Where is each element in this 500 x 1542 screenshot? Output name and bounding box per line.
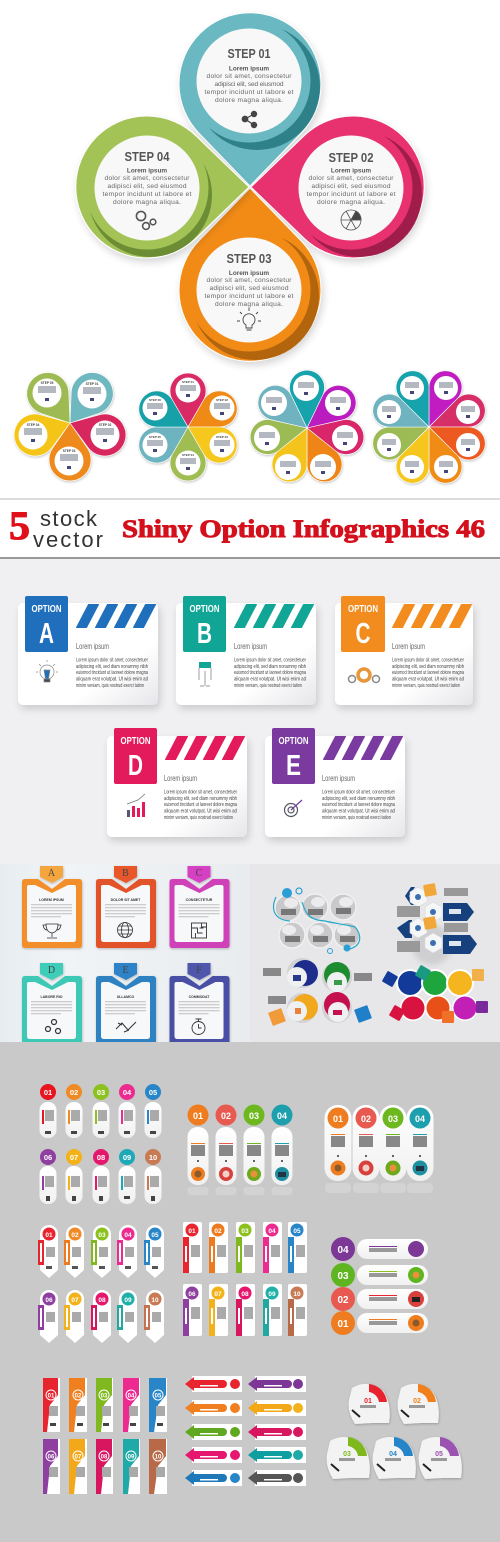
panel: option C: euismod tincidunt ut laoreet dolore magna [392, 670, 464, 676]
panel: ten arrow tags [38, 1225, 164, 1343]
pill 03: 03 [97, 1088, 105, 1097]
panel: option D: D [128, 750, 143, 782]
cluster: hexagon arrows [397, 883, 477, 965]
banner 03: 03 [101, 1394, 108, 1400]
arrow crimson [248, 1424, 306, 1440]
panel: six step flower: STEP 01 [182, 380, 194, 384]
frame C: C [196, 868, 203, 879]
row 03: 03 [337, 1271, 349, 1282]
panel: option B: aliquam erat volutpat. Ut wisi enim ad [234, 676, 306, 682]
options section background [0, 559, 500, 864]
panel: option B: Lorem ipsum dolor sit amet, consectetuer [234, 658, 306, 664]
panel: option E: Lorem ipsum [322, 774, 355, 783]
panel: option B: OPTION [190, 604, 220, 615]
tag 04: 04 [124, 1232, 132, 1239]
panel: option C: OPTION [348, 604, 378, 615]
panel: ten small pills [40, 1084, 162, 1204]
banner 07: 07 [75, 1454, 82, 1460]
pill 04: 04 [277, 1111, 287, 1121]
logo text: 5 [9, 503, 30, 548]
sticker 03: 03 [343, 1451, 351, 1458]
banner 08: 08 [101, 1454, 108, 1460]
card 10: 10 [293, 1291, 301, 1298]
frame E: E [122, 965, 129, 976]
panel: option C: Lorem ipsum [392, 642, 425, 651]
card 01: 01 [188, 1228, 196, 1235]
card 08: 08 [241, 1291, 249, 1298]
step 03 petal: Lorem ipsum [229, 270, 269, 277]
panel: option A: Lorem ipsum [76, 642, 109, 651]
panel: five step flower [8, 364, 132, 481]
frame C: CONSECTETUR [186, 898, 213, 902]
step 04 petal: STEP 04 [124, 150, 170, 164]
frame B: B [122, 868, 129, 879]
pill 05: 05 [149, 1088, 157, 1097]
arrow pink [185, 1447, 242, 1463]
pill 08: 08 [97, 1153, 105, 1162]
arrow purple [248, 1376, 306, 1392]
card 02: 02 [214, 1228, 222, 1235]
pill 10: 10 [149, 1153, 157, 1162]
step 03 petal: STEP 03 [226, 252, 272, 266]
pill 01: 01 [44, 1088, 52, 1097]
tag 02: 02 [71, 1232, 79, 1239]
step 01 petal: STEP 01 [228, 47, 271, 61]
panel: ten arrow labels [185, 1376, 306, 1486]
pill 02: 02 [361, 1114, 371, 1124]
panel: option A: Lorem ipsum dolor sit amet, consectetuer [76, 658, 148, 664]
panel: four wide pills [324, 1105, 434, 1193]
frame E: ULLAMCO [117, 995, 135, 999]
tag 09: 09 [124, 1297, 132, 1304]
pill 03: 03 [249, 1111, 259, 1121]
logo text: stock [40, 506, 98, 531]
panel: option A: minim veniam, quis nostrud exerci tation [76, 683, 144, 689]
step 04 petal: adipisci elit, sed eiusmod [108, 183, 187, 190]
sticker 05: 05 [435, 1451, 443, 1458]
panel: option B: adipiscing elit, sed diam nonummy nibh [234, 664, 306, 670]
step 03 petal: dolore magna aliqua. [215, 301, 283, 308]
banner 06: 06 [48, 1454, 55, 1460]
card 06: 06 [188, 1291, 196, 1298]
step 01 petal: Lorem ipsum [229, 66, 269, 72]
card 03: 03 [241, 1228, 249, 1235]
panel: eight step flower [368, 366, 490, 488]
pill 02: 02 [221, 1111, 231, 1121]
pill 01: 01 [333, 1114, 343, 1124]
row 04: 04 [337, 1245, 349, 1256]
panel: option B: minim veniam, quis nostrud exerci tation [234, 683, 302, 689]
pill 02: 02 [70, 1088, 78, 1097]
step 01 petal: dolore magna aliqua. [215, 97, 283, 104]
panel: option B: B [197, 618, 212, 650]
step 02 petal: Lorem ipsum [331, 168, 371, 174]
sticker 01: 01 [364, 1398, 372, 1405]
step 01 petal [179, 13, 321, 186]
icon: light bulb [237, 308, 261, 330]
bottom section background [0, 1042, 500, 1542]
step 02 petal: dolor sit amet, consectetur [308, 175, 394, 182]
arrow teal [248, 1447, 306, 1463]
step 04 petal [76, 116, 249, 258]
arrow blue [185, 1470, 242, 1486]
step 03 petal [179, 188, 321, 361]
frame B: DOLOR SIT AMET [111, 898, 141, 902]
tag 03: 03 [98, 1232, 106, 1239]
panel: option A: euismod tincidunt ut laoreet dolore magna [76, 670, 148, 676]
pill 04: 04 [415, 1114, 425, 1124]
banner 04: 04 [128, 1394, 135, 1400]
banner 02: 02 [75, 1394, 82, 1400]
sticker 02: 02 [413, 1398, 421, 1405]
banner 05: 05 [155, 1394, 162, 1400]
panel: five step flower: STEP 02 [99, 423, 112, 427]
icon: target [284, 800, 302, 816]
panel: option A: adipiscing elit, sed diam nonummy nibh [76, 664, 148, 670]
step 04 petal: Lorem ipsum [127, 168, 167, 174]
pill 03: 03 [388, 1114, 398, 1124]
sticker 04: 04 [389, 1451, 397, 1458]
logo text: vector [33, 527, 103, 552]
pill 09: 09 [123, 1153, 131, 1162]
panel: ten flat cards with side bars [183, 1222, 307, 1336]
frame A [22, 866, 82, 948]
step 03 petal: adipisci elit, sed eiusmod [210, 285, 289, 292]
step 02 petal: adipisci elit, sed eiusmod [312, 183, 391, 190]
panel: option E: Lorem ipsum dolor sit amet, consectetuer [322, 790, 395, 796]
step 02 petal [251, 116, 424, 258]
panel: option E: OPTION [278, 736, 308, 747]
tag 07: 07 [71, 1297, 79, 1304]
frame A: LOREM IPSUM [39, 898, 64, 902]
panel: option B: euismod tincidunt ut laoreet dolore magna [234, 670, 306, 676]
step 03 petal: dolor sit amet, consectetur [206, 277, 292, 284]
icon: gears [136, 211, 156, 229]
panel: option E: adipiscing elit, sed diam nonummy nibh [322, 796, 395, 802]
tag 10: 10 [151, 1297, 159, 1304]
step 01 petal: dolor sit amet, consectetur [206, 73, 292, 80]
tag 01: 01 [45, 1232, 53, 1239]
panel: option E: minim veniam, quis nostrud exerci tation [322, 815, 391, 821]
step 02 petal: STEP 02 [328, 151, 374, 165]
frame D [22, 963, 82, 1045]
panel: option D: adipiscing elit, sed diam nonummy nibh [164, 796, 237, 802]
panel: option A: OPTION [32, 604, 62, 615]
panel: five step flower: STEP 01 [86, 382, 99, 386]
panel: option C: adipiscing elit, sed diam nonummy nibh [392, 664, 464, 670]
tag 06: 06 [45, 1297, 53, 1304]
panel: four tall pills with drop heads [188, 1104, 292, 1195]
arrow amber [248, 1400, 306, 1416]
arrow green [185, 1424, 242, 1440]
frame B [96, 866, 156, 948]
panel: option C: Lorem ipsum dolor sit amet, consectetuer [392, 658, 464, 664]
pill 01: 01 [193, 1111, 203, 1121]
panel: four horizontal pills [331, 1237, 428, 1335]
pill 06: 06 [44, 1153, 52, 1162]
panel: six step flower: STEP 04 [182, 453, 194, 457]
panel: option D: Lorem ipsum [164, 774, 197, 783]
banner [0, 498, 500, 559]
card 05: 05 [293, 1228, 301, 1235]
card 04: 04 [268, 1228, 276, 1235]
panel: option C: aliquam erat volutpat. Ut wisi enim ad [392, 676, 464, 682]
arrow red [185, 1376, 242, 1392]
panel: option C [335, 596, 473, 705]
step 01 petal: tempor incidunt ut labore et [204, 89, 294, 96]
icon: share [242, 111, 257, 128]
panel: option C: C [356, 618, 371, 650]
panel: option B [176, 596, 316, 705]
icon: gears [348, 669, 380, 682]
tag 08: 08 [98, 1297, 106, 1304]
panel: option A: A [39, 618, 54, 650]
step 04 petal: dolor sit amet, consectetur [104, 175, 190, 182]
frame A: A [48, 868, 56, 879]
pill 04: 04 [123, 1088, 132, 1097]
panel: option B: Lorem ipsum [234, 642, 267, 651]
panel: option D [107, 728, 247, 837]
panel: five step flower: STEP 05 [41, 381, 54, 385]
frame E [96, 963, 156, 1045]
frame F [170, 963, 230, 1045]
frame F: COMMODAT [189, 995, 210, 999]
panel: six step flower: STEP 03 [216, 435, 228, 439]
panel: option D: Lorem ipsum dolor sit amet, consectetuer [164, 790, 237, 796]
cluster: crescent circles [263, 958, 372, 1026]
panel: option E: aliquam erat volutpat. Ut wisi enim ad [322, 808, 395, 814]
panel: five step flower: STEP 03 [63, 449, 76, 453]
cluster: gray linked circles [274, 888, 360, 954]
card 07: 07 [214, 1291, 222, 1298]
row 01: 01 [337, 1319, 349, 1330]
panel: four step petal diagram [76, 13, 424, 361]
panel: six step flower: STEP 02 [216, 398, 228, 402]
row 02: 02 [337, 1295, 349, 1306]
banner 10: 10 [155, 1454, 162, 1460]
card 09: 09 [268, 1291, 276, 1298]
panel: option E: euismod tincidunt ut laoreet dolore magna [322, 802, 395, 808]
arrow gray [248, 1470, 306, 1486]
panel: six step flower: STEP 05 [149, 435, 161, 439]
step 02 petal: dolore magna aliqua. [317, 199, 385, 206]
arrow orange [185, 1400, 242, 1416]
panel: option D: euismod tincidunt ut laoreet dolore magna [164, 802, 237, 808]
step 03 petal: tempor incidunt ut labore et [204, 293, 294, 300]
frame C [170, 866, 230, 948]
panel: option D: minim veniam, quis nostrud exerci tation [164, 815, 233, 821]
panel: option A: aliquam erat volutpat. Ut wisi enim ad [76, 676, 148, 682]
panel: six step flower [132, 373, 244, 481]
icon: bulb [36, 660, 58, 682]
panel: seven step flower [247, 370, 367, 488]
cluster: colorful circles with squares [382, 965, 488, 1023]
icon: figures [199, 662, 211, 686]
panel: five step flower: STEP 04 [27, 423, 40, 427]
title: Shiny Option Infographics 46 [122, 516, 485, 543]
section backgrounds: lettered frames and circle clusters [0, 864, 500, 1044]
frame D: LABORE RIO [41, 995, 63, 999]
banner 01: 01 [48, 1394, 55, 1400]
logo text [9, 503, 103, 552]
pill 07: 07 [70, 1153, 78, 1162]
panel: six step flower: STEP 06 [149, 398, 161, 402]
panel: option D: OPTION [120, 736, 150, 747]
frame D: D [48, 965, 55, 976]
step 04 petal: tempor incidunt ut labore et [102, 191, 192, 198]
tag 05: 05 [151, 1232, 159, 1239]
panel: ten tall banners [43, 1378, 167, 1494]
banner 09: 09 [128, 1454, 135, 1460]
frame F: F [196, 965, 202, 976]
panel: option D: aliquam erat volutpat. Ut wisi enim ad [164, 808, 237, 814]
step 04 petal: dolore magna aliqua. [113, 199, 181, 206]
icon: bar chart [127, 794, 145, 817]
step 01 petal: adipisci elit, sed eiusmod [214, 81, 284, 88]
step 02 petal: tempor incidunt ut labore et [306, 191, 396, 198]
panel: option C: minim veniam, quis nostrud exerci tation [392, 683, 460, 689]
panel: five sticker gauges [327, 1384, 462, 1479]
panel: option A [18, 596, 158, 705]
icon: pie wheel [341, 210, 361, 230]
panel: option E [265, 728, 405, 837]
panel: option E: E [286, 750, 301, 782]
